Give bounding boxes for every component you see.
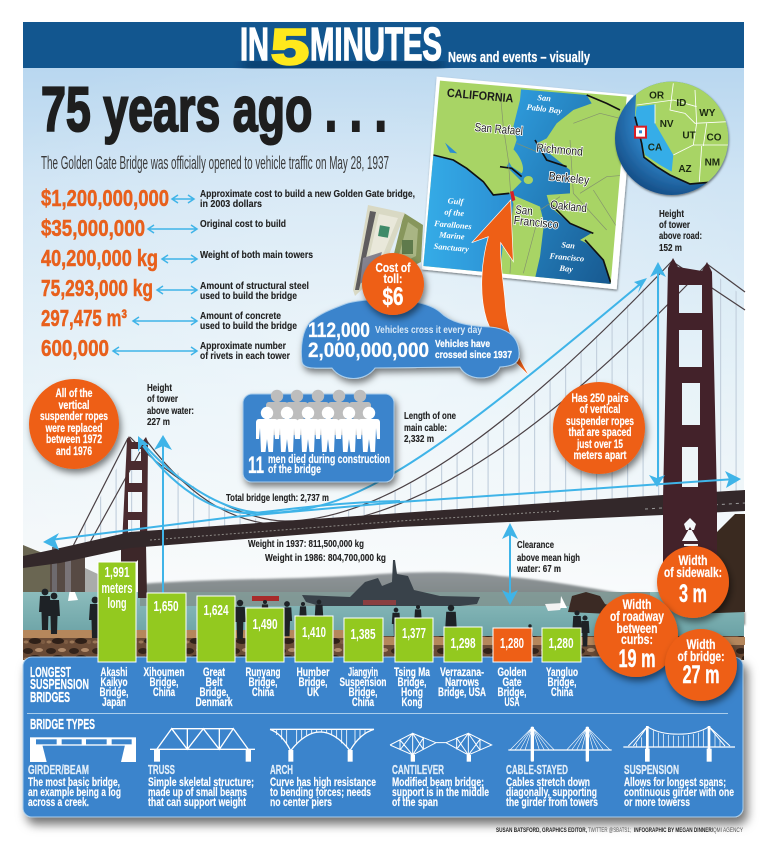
arrow: second cable curve — [143, 446, 400, 513]
bridge name labels — [100, 667, 578, 709]
locator globe — [615, 73, 733, 195]
text: cable-stayed: CABLE-STAYED — [506, 763, 568, 777]
battleship — [302, 560, 480, 606]
logo: In 5 Minutes: MINUTES — [310, 18, 442, 70]
text: cantilever: CANTILEVER — [392, 763, 444, 777]
callout: width of bridge — [665, 629, 737, 701]
text: arch: Curve has high resistance — [270, 777, 376, 789]
callout: width of bridge: Width — [686, 636, 716, 652]
text: girder/beam: GIRDER/BEAM — [28, 763, 89, 777]
callout: width of roadway: 19 m — [618, 645, 656, 673]
left tower — [122, 436, 148, 545]
label: tower height above water — [147, 382, 194, 428]
text: girder/beam — [28, 763, 121, 809]
cream bill — [353, 205, 405, 296]
label: total length: Total bridge length: 2,737 m — [226, 492, 329, 504]
map labels: Sanctuary — [433, 242, 469, 254]
heading: bridge types: BRIDGE TYPES — [30, 716, 95, 733]
heading: longest suspension bridges: LONGEST — [30, 664, 71, 681]
bar: Tsing Ma: 1,377 — [402, 625, 426, 642]
bridge name labels: Bridge, — [298, 677, 328, 689]
label: cable length — [404, 410, 456, 445]
callout: men died — [243, 390, 394, 482]
label: cable length: Length of one — [404, 410, 456, 422]
bridge name labels: Hong — [401, 687, 423, 699]
bar: Verrazano — [444, 627, 482, 662]
bridge name labels: USA — [504, 697, 520, 709]
bar: Runyang: 1,490 — [252, 616, 278, 633]
bridge name labels: Kaikyo — [100, 677, 128, 689]
label: tower height above water: Height — [147, 382, 172, 394]
icon: arch bridge — [270, 729, 374, 762]
bridge name labels: Bridge, — [100, 687, 128, 699]
callout: suspender ropes: suspender ropes — [566, 416, 634, 428]
text: suspension: continuous girder with one — [624, 787, 734, 799]
callout: ropes replaced: vertical — [58, 400, 90, 412]
icon: truss bridge — [150, 729, 255, 762]
state labels: AZ — [678, 164, 692, 175]
map sheet — [422, 77, 633, 289]
callout: cost of toll: $6 — [382, 283, 404, 311]
icon: suspension bridge — [623, 726, 735, 762]
label: tower height above road — [659, 208, 702, 254]
label: tower height above water: of tower — [147, 393, 178, 405]
label: bridge weights: Weight in 1986: 804,700,000 kg — [265, 552, 386, 564]
fact: concrete: Amount of concrete — [200, 310, 281, 322]
arrow: main cable length — [140, 280, 645, 513]
bar: Tsing Ma — [395, 618, 433, 662]
blue measurement arrows — [50, 268, 735, 600]
map labels: Berkeley — [548, 169, 590, 187]
callout: suspender ropes — [553, 382, 645, 474]
logo: In 5 Minutes: IN — [240, 18, 269, 70]
label: tower height above water: 227 m — [147, 416, 170, 428]
bar: Humber: 1,410 — [302, 624, 326, 641]
text: cantilever: Modified beam bridge; — [392, 777, 484, 789]
label: tower height above road: Height — [659, 208, 684, 220]
label: clearance: water: 67 m — [516, 563, 561, 575]
daily vehicles: 112,000 — [308, 319, 370, 342]
bridge name labels: Bridge, — [248, 677, 278, 689]
bar: Xihoumen — [147, 593, 186, 662]
icon: girder bridge — [30, 737, 136, 762]
callout: suspender ropes: just over 15 — [576, 439, 623, 451]
bridge name labels: Golden — [498, 667, 526, 679]
header band — [23, 18, 744, 75]
right headland — [690, 514, 745, 614]
label: cable length: main cable: — [404, 422, 447, 434]
ocean — [420, 155, 513, 273]
fact: new bridge cost: in 2003 dollars — [200, 198, 262, 210]
suspender ropes — [70, 262, 668, 550]
map labels: Francisco — [513, 213, 560, 232]
callout: ropes replaced: suspender ropes — [40, 411, 108, 423]
callout: width of sidewalk: 3 m — [679, 580, 707, 608]
fact: steel: Amount of structural steel — [200, 280, 309, 292]
bridge name labels: China — [352, 697, 374, 709]
text: arch: no center piers — [270, 797, 332, 809]
text: truss: TRUSS — [148, 763, 175, 777]
callout: suspender ropes: meters apart — [574, 450, 627, 462]
golden gate marker — [510, 191, 515, 201]
bridge name labels: Great — [203, 667, 225, 679]
fact: original cost: $35,000,000 — [41, 215, 145, 241]
map labels: of the — [444, 208, 465, 218]
heading: longest suspension bridges: SUSPENSION — [30, 676, 89, 693]
logo: In 5 Minutes — [240, 18, 442, 75]
map labels: San — [537, 93, 552, 103]
state lines — [637, 83, 730, 182]
daily vehicles: Vehicles cross it every day — [375, 324, 482, 336]
bridge name labels: Belt — [206, 677, 223, 689]
fact: steel: used to build the bridge — [200, 290, 297, 302]
callout: suspender ropes: that are spaced — [568, 427, 632, 439]
bridge name labels: Yangluo — [546, 667, 578, 679]
callout: ropes replaced: and 1976 — [56, 446, 92, 458]
bar: Yangluo: 1,280 — [548, 635, 574, 652]
bridge name labels: Runyang — [246, 667, 280, 679]
callout: cost of toll: Cost of — [376, 261, 411, 275]
bridge name labels: Akashi — [100, 667, 128, 679]
fact: steel: 75,293,000 kg — [41, 275, 153, 301]
arrow: total bridge length — [50, 479, 735, 540]
main cables — [70, 260, 745, 552]
state labels: UT — [682, 130, 696, 141]
coastline shadow — [433, 95, 620, 283]
callout: width of roadway — [594, 593, 678, 677]
text: cable-stayed: the girder from towers — [506, 797, 598, 809]
map labels: Farallones — [433, 219, 472, 231]
bar: Runyang — [246, 608, 284, 662]
fact: concrete: used to build the bridge — [200, 320, 297, 332]
heading: longest suspension bridges — [30, 664, 89, 706]
callout: width of bridge: 27 m — [682, 661, 720, 689]
callout: men died: men died during construction — [268, 454, 390, 466]
bar: Golden Gate — [493, 628, 532, 662]
far hills — [140, 572, 745, 625]
bridge name labels: Bridge, USA — [438, 687, 486, 699]
arrow: tower height above water — [162, 440, 164, 593]
fact: new bridge cost: Approximate cost to build a new Golden Gate bridge, — [200, 188, 415, 200]
state labels: OR — [649, 91, 664, 102]
bridge name labels: Bridge, — [348, 687, 378, 699]
bar: Humber — [295, 616, 333, 662]
bridge name labels: China — [551, 687, 573, 699]
bridge name labels: China — [153, 687, 175, 699]
bar: Verrazano: 1,298 — [450, 635, 476, 652]
logo: In 5 Minutes: 5 — [271, 19, 309, 75]
bridge name labels: Bridge, — [548, 677, 576, 689]
arrow: clearance — [509, 528, 511, 600]
bridge name labels: Bridge, — [398, 677, 426, 689]
callout: suspender ropes: of vertical — [580, 404, 620, 416]
bar: Great Belt: 1,624 — [204, 602, 229, 619]
harbour photo backdrop — [23, 514, 745, 660]
fact list — [41, 185, 415, 362]
callout: cost of toll — [362, 253, 424, 315]
label: tower height above road: 152 m — [659, 242, 682, 254]
map labels: Pablo Bay — [526, 103, 563, 116]
callout: men died: of the bridge — [268, 464, 321, 476]
bar: Jiangyin — [344, 618, 383, 662]
text: girder/beam: The most basic bridge, — [28, 777, 120, 789]
fact: tower weight — [41, 245, 313, 271]
bridge name labels: Kong — [402, 697, 422, 709]
state labels: ID — [676, 98, 686, 109]
green bill — [388, 213, 423, 278]
california — [635, 104, 673, 172]
text: cantilever — [392, 763, 489, 809]
text: girder/beam: across a creek. — [28, 797, 89, 809]
text: truss: that can support weight — [148, 797, 246, 809]
callout: men died: 11 — [248, 452, 264, 479]
arrow: tower height above road — [657, 268, 659, 478]
sea wall and rocks — [23, 636, 744, 660]
bridge name labels: UK — [307, 687, 319, 699]
credit line: INFOGRAPHIC BY MEGAN DINNER/ — [634, 827, 713, 834]
callout: width of roadway: of roadway — [610, 608, 664, 624]
deck — [23, 490, 745, 568]
bridge name labels: Bridge, — [200, 687, 228, 699]
callout: width of roadway: Width — [622, 596, 652, 612]
callout: width of roadway: curbs: — [621, 631, 653, 647]
map labels: Oakland — [550, 197, 588, 215]
tagline: News and events – visually — [448, 49, 590, 66]
total vehicles: Vehicles have — [435, 338, 490, 350]
bar: Akashi: 1,991 — [104, 564, 130, 581]
text: cable-stayed: Cables stretch down — [506, 777, 590, 789]
label: clearance: Clearance — [517, 539, 554, 551]
banknotes — [353, 205, 423, 296]
bridge name labels: Tsing Ma — [394, 667, 430, 679]
bar: Golden Gate: 1,280 — [500, 635, 524, 652]
bridge name labels: Denmark — [196, 697, 233, 709]
label: bridge weights: Weight in 1937: 811,500,000 kg — [248, 538, 364, 550]
callout: ropes replaced: between 1972 — [46, 434, 102, 446]
bar: Akashi: long — [108, 595, 126, 612]
orange arrow to map — [472, 200, 529, 376]
state labels: NM — [705, 158, 720, 169]
land — [635, 82, 728, 184]
left tower below deck — [121, 545, 147, 598]
water — [23, 592, 744, 642]
text: suspension: or more towerss — [624, 797, 690, 809]
bar: Akashi — [98, 562, 136, 662]
fact: rivets: 600,000 — [41, 335, 109, 361]
label: clearance — [516, 539, 580, 575]
bar: Akashi: meters — [102, 580, 132, 597]
bridge name labels: Bridge, — [150, 677, 178, 689]
credit line — [496, 827, 743, 834]
fort point — [568, 592, 622, 614]
label: clearance: above mean high — [517, 552, 580, 564]
fact: tower weight: Weight of both main towers — [200, 249, 313, 261]
fact: concrete — [41, 305, 297, 332]
text: suspension: Allows for longest spans; — [624, 777, 726, 789]
map labels: San — [561, 240, 576, 251]
bridge name labels: Narrows — [445, 677, 479, 689]
fact: original cost — [41, 215, 286, 241]
map of San Francisco bay — [420, 77, 633, 289]
left headland — [23, 545, 50, 592]
map labels: Francisco — [548, 251, 585, 264]
callout: cost of toll: toll: — [384, 272, 402, 286]
text: truss — [148, 763, 254, 809]
bridge name labels: Gate — [502, 677, 522, 689]
callout: width of sidewalk: Width — [678, 552, 708, 568]
right tower — [663, 258, 717, 575]
icon: cable-stayed bridge — [508, 727, 612, 762]
bar: Yangluo — [542, 628, 581, 662]
credit line: SUSAN BATSFORD, GRAPHICS EDITOR, — [496, 827, 587, 834]
fact: original cost: Original cost to build — [200, 218, 286, 230]
callout: ropes replaced: were replaced — [45, 423, 102, 435]
bar chart: longest suspension bridges — [98, 562, 581, 662]
panel: sky background — [23, 60, 744, 660]
callout: width of sidewalk: of sidewalk: — [664, 564, 722, 580]
roads — [500, 90, 627, 273]
map labels: CALIFORNIA — [446, 86, 514, 105]
bar: Great Belt — [197, 596, 235, 662]
text: cable-stayed: diagonally, supporting — [506, 787, 597, 799]
total vehicles: 2,000,000,000 — [308, 339, 429, 362]
fact: tower weight: 40,200,000 kg — [41, 245, 158, 271]
subtitle: The Golden Gate Bridge was officially opened to vehicle traffic on May 28, 1937 — [41, 153, 389, 173]
label: tower height above water: above water: — [147, 405, 194, 417]
callout: suspender ropes: Has 250 pairs — [572, 393, 628, 405]
text: truss: made up of small beams — [148, 787, 247, 799]
callout: width of bridge: of bridge: — [678, 648, 724, 664]
state labels: CA — [648, 143, 662, 154]
label: bridge weights — [248, 538, 386, 564]
fact: steel — [41, 275, 309, 302]
bridge photo illustration — [23, 258, 745, 646]
callout: ropes replaced: All of the — [56, 388, 92, 400]
map labels: Gulf — [447, 196, 465, 207]
bridge name labels: Suspension — [340, 677, 386, 689]
car: traffic counts — [301, 299, 519, 378]
bridge name labels: Bridge, — [498, 687, 526, 699]
map labels: Marine — [438, 230, 465, 241]
map labels — [433, 86, 590, 274]
fact: rivets: of rivets in each tower — [200, 350, 290, 362]
total vehicles: crossed since 1937 — [435, 349, 512, 361]
label: cable length: 2,332 m — [404, 433, 434, 445]
callout: width of roadway: between — [616, 620, 658, 636]
credit line: QMI AGENCY — [713, 827, 743, 834]
credit line: TWITTER @SBATS1; — [588, 827, 631, 834]
bridge name labels: Humber — [296, 667, 330, 679]
locator square — [635, 127, 646, 138]
fact: rivets — [41, 335, 290, 362]
fact: rivets: Approximate number — [200, 340, 286, 352]
text: suspension — [624, 763, 734, 809]
text: arch — [270, 763, 376, 809]
icons: white figures — [256, 407, 380, 452]
text: cantilever: of the span — [392, 797, 438, 809]
heading: longest suspension bridges: BRIDGES — [30, 689, 70, 706]
state labels: NV — [660, 119, 674, 130]
text: cantilever: support is in the middle — [392, 787, 489, 799]
map labels: Bay — [558, 264, 574, 274]
bridge name labels: Verrazana- — [440, 667, 484, 679]
state labels: CO — [707, 132, 722, 143]
daily vehicles — [308, 319, 482, 342]
text: girder/beam: an example being a log — [28, 787, 121, 799]
map labels: San Rafael — [474, 120, 523, 138]
label: tower height above road: of tower — [659, 219, 690, 231]
bar: Xihoumen: 1,650 — [154, 598, 178, 615]
text: arch: to bending forces; needs — [270, 787, 371, 799]
bay — [507, 89, 612, 287]
pedestrians — [39, 589, 590, 646]
state labels: WY — [699, 108, 716, 119]
total vehicles — [308, 338, 512, 362]
fact: new bridge cost — [41, 185, 415, 211]
marin peninsula and islands — [509, 150, 523, 174]
map labels: Richmond — [536, 141, 583, 159]
icon: cantilever bridge — [390, 733, 492, 762]
approach pier — [50, 547, 85, 592]
label: tower height above road: above road: — [659, 230, 702, 242]
bridge name labels: Jiangyin — [348, 667, 378, 679]
state labels — [648, 91, 722, 175]
panel: lower blue panel — [23, 657, 743, 817]
boats — [68, 582, 567, 611]
bridge name labels: Xihoumen — [144, 667, 184, 679]
bar: Jiangyin: 1,385 — [350, 626, 376, 643]
bridge name labels: Japan — [102, 697, 126, 709]
callout: ropes replaced — [29, 379, 119, 469]
fact: new bridge cost: $1,200,000,000 — [41, 185, 169, 211]
title: 75 years ago . . . — [41, 75, 387, 145]
text: arch: ARCH — [270, 763, 293, 777]
text: truss: Simple skeletal structure; — [148, 777, 254, 789]
bridge name labels: China — [252, 687, 274, 699]
text: cable-stayed — [506, 763, 598, 809]
fact: concrete: 297,475 m³ — [41, 305, 127, 331]
map labels: San — [515, 202, 533, 218]
icons: gray figures — [266, 390, 371, 435]
text: suspension: SUSPENSION — [624, 763, 679, 777]
arrowheads — [43, 262, 741, 605]
callout: width of sidewalk — [657, 546, 729, 618]
